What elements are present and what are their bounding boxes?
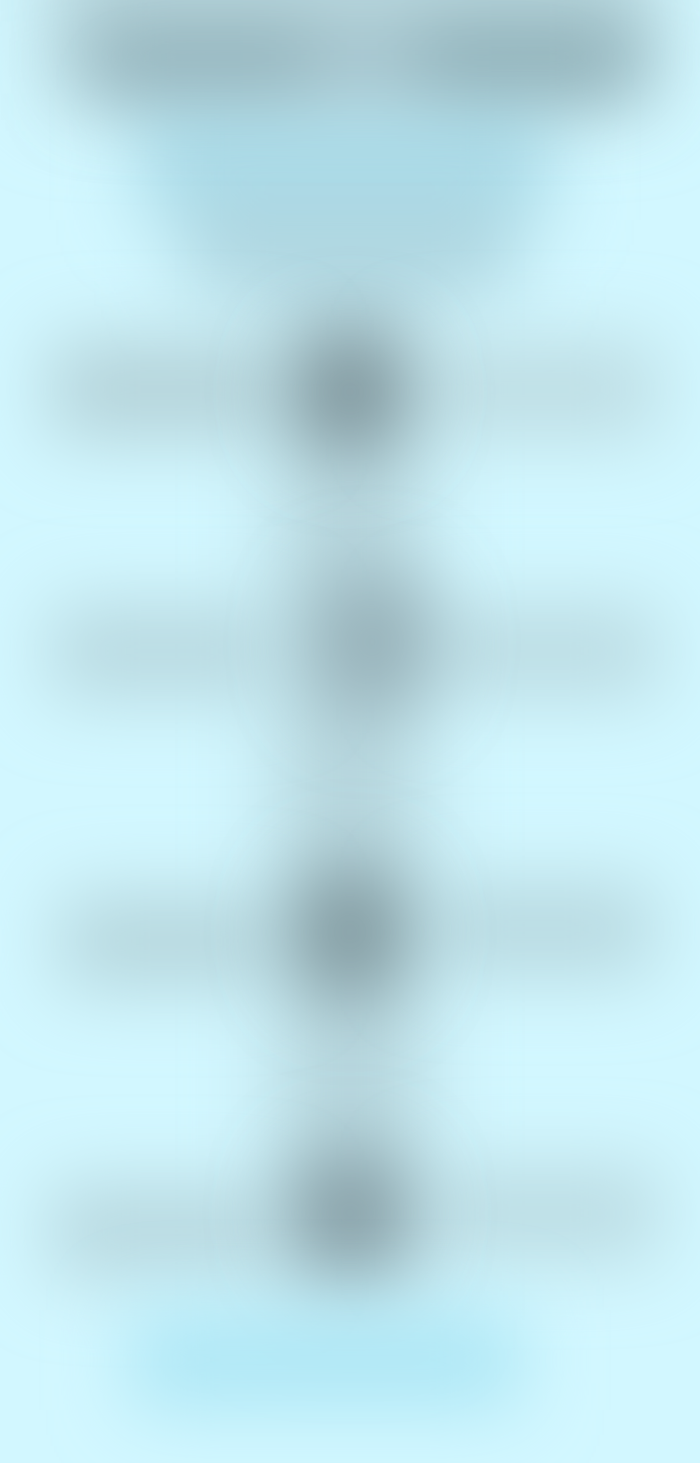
row 2: centre icon <box>310 570 434 714</box>
row 4: centre icon <box>288 1149 412 1277</box>
row 2: right text <box>420 605 660 697</box>
row 4: left text <box>50 1185 285 1277</box>
row 3: right text <box>420 883 655 975</box>
row 1: right text <box>410 340 660 438</box>
row 2: left text <box>50 605 290 697</box>
central timeline connector <box>280 240 420 1320</box>
title <box>85 20 640 95</box>
row 3: left text <box>60 895 290 987</box>
row 1: left text <box>50 340 290 438</box>
header panel <box>45 0 655 100</box>
row 1: centre icon <box>290 332 410 452</box>
closing banner <box>130 1310 520 1410</box>
row 4: right text <box>420 1167 660 1259</box>
intro banner <box>140 90 550 295</box>
row 3: centre icon <box>290 864 410 1000</box>
